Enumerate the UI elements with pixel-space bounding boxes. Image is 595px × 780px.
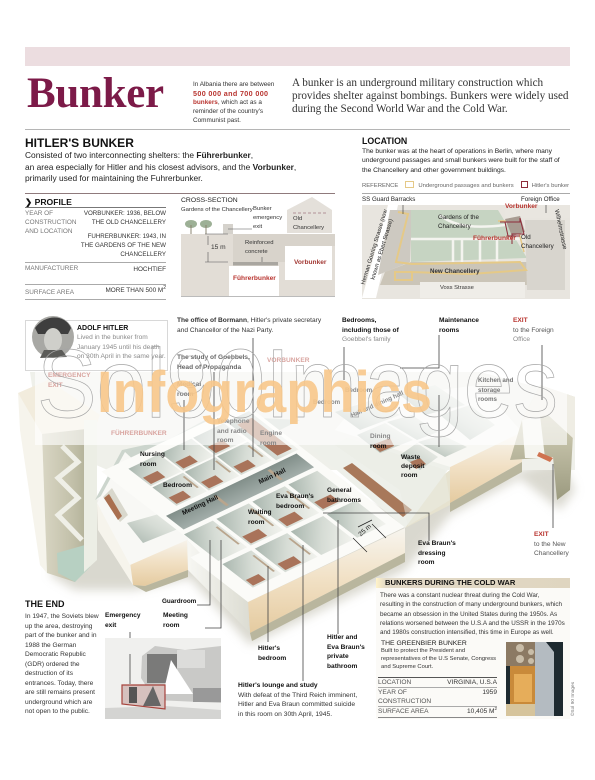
label: Hitler and Eva Braun's bathroom: Hitler and xyxy=(327,634,357,641)
label: vorbunker: VORBUNKER xyxy=(267,357,310,364)
label: nursing xyxy=(140,451,165,468)
cross-section title: CROSS-SECTION xyxy=(181,197,238,204)
callout: Albania: Communist past. xyxy=(193,117,241,124)
label: Hitler's bedroom xyxy=(258,644,286,663)
map: SS barracks: SS Guard Barracks xyxy=(362,196,415,203)
label: maintenance xyxy=(439,317,479,334)
label: Hitler's bedroom: Hitler's xyxy=(258,645,280,652)
shadow under building xyxy=(50,460,575,645)
heading: profile: ❯ PROFILE xyxy=(25,197,72,207)
fade strip over top of illustration xyxy=(35,345,567,445)
profile labels: AND LOCATION xyxy=(25,228,72,235)
row values: 10,405 M2 xyxy=(467,706,497,715)
heading: Hitler's bunker: HITLER'S BUNKER xyxy=(25,136,134,150)
label: medical room: Medical xyxy=(177,381,201,388)
concrete label: Reinforced xyxy=(245,240,274,246)
label: emergency exit top: EXIT xyxy=(48,382,63,388)
map legend: REFERENCE Underground passages and bunkers Hitler's bunker xyxy=(362,183,569,189)
row values: 1959 xyxy=(482,689,497,696)
map: new chancellery: New Chancellery xyxy=(430,268,480,275)
heading: location: LOCATION xyxy=(362,136,407,146)
right wing faces xyxy=(405,470,450,528)
fuhrerbunker label: Führerbunker xyxy=(233,275,276,282)
label: maintenance: Maintenance xyxy=(439,317,479,324)
profile values: Fuhrerbunker: FUHRERBUNKER: 1943, IN xyxy=(88,233,166,240)
label: exit new chancellery: to the New xyxy=(534,540,566,548)
panel text: resulting in the construction of many underground bunkers, which xyxy=(380,601,562,608)
photo: Greenbrier bunker door xyxy=(506,642,563,716)
label: 25 m: 25 m xyxy=(357,523,373,538)
main block plan with rooms xyxy=(88,403,405,602)
label: bedrooms: Bedrooms, xyxy=(342,317,376,324)
label: emergency exit top: EMERGENCY xyxy=(48,372,90,379)
bio: Lived in the bunker from xyxy=(77,334,148,341)
callout: Albania: 500 000 and 700 000 xyxy=(193,89,268,98)
label: fuhrerbunker: FÜHRERBUNKER xyxy=(111,430,167,437)
label: waiting: room xyxy=(248,518,264,526)
label: general bathrooms: bathrooms xyxy=(327,496,361,504)
panel text: relations worsened between the U.S.A and the USSR in the 1970s xyxy=(380,620,565,627)
profile labels: YEAR OF xyxy=(25,210,53,217)
text block: Hitler's bunker description xyxy=(25,150,296,183)
text block: the end: up the area, destroying xyxy=(25,622,92,630)
text block: the end: Democratic Republic xyxy=(25,651,86,658)
row labels: LOCATION xyxy=(378,679,411,686)
panel: profile xyxy=(25,197,166,300)
profile values: THE OLD CHANCELLERY xyxy=(92,219,166,226)
label: meeting hall: Meeting Hall xyxy=(181,494,219,517)
label: medical room: room xyxy=(177,390,193,398)
map: old chancellery: Old xyxy=(521,234,531,241)
sub text xyxy=(381,647,496,671)
label: exit new chancellery: Chancellery xyxy=(534,550,569,557)
stair tower xyxy=(18,380,100,582)
label: maintenance: rooms xyxy=(439,326,459,334)
concrete label xyxy=(245,240,274,254)
label: exit foreign office: EXIT xyxy=(513,317,528,324)
label: kitchen: rooms xyxy=(478,396,497,403)
map: hermann goering strasse: Herman Goering Strasse (now xyxy=(361,209,389,285)
surface value: MORE THAN 500 M2 xyxy=(105,285,166,294)
profile labels xyxy=(25,210,76,235)
label: upper bedroom: Bedroom xyxy=(345,387,372,394)
watermark: Infographics xyxy=(97,360,432,425)
label: emergency exit: Emergency xyxy=(105,612,141,619)
map: fuhrerbunker: Führerbunker xyxy=(473,235,516,242)
map labels xyxy=(360,196,567,291)
credit: ©Sol 90 Images xyxy=(571,682,576,716)
label: dining xyxy=(370,433,391,450)
label: Goebbels study: The study of Goebbels, xyxy=(177,354,250,361)
label: Eva Braun's dressing room: Eva Braun's xyxy=(418,540,456,547)
label: Eva Braun's bedroom: bedroom xyxy=(276,502,304,510)
panel header xyxy=(376,578,570,588)
label: meeting room: Meeting xyxy=(163,612,188,619)
label: Eva Braun's dressing room: room xyxy=(418,559,434,566)
panel: Adolf Hitler portrait card xyxy=(25,320,168,371)
label: hall: Hall and dining hall xyxy=(350,390,405,419)
panel text xyxy=(380,591,565,638)
name: ADOLF HITLER xyxy=(77,325,128,332)
exit label xyxy=(253,206,282,230)
map: gardens xyxy=(438,214,479,230)
label: engine: Engine xyxy=(260,430,282,437)
text block: Hitler's lounge: Hitler's lounge and study xyxy=(238,682,318,689)
left wing xyxy=(97,452,200,592)
label: Eva Braun's dressing room xyxy=(418,540,456,566)
label: Hitler and Eva Braun's bathroom: Eva Braun's xyxy=(327,644,365,650)
label: exit foreign office xyxy=(513,317,554,343)
label: main hall: Main Hall xyxy=(258,467,287,486)
map: hermann goering strasse: known as Ebert Strasse) xyxy=(370,218,394,280)
right wing rooms xyxy=(335,385,495,470)
label: waste: Waste xyxy=(401,454,420,461)
exit label: Bunker xyxy=(253,206,272,212)
row values xyxy=(447,678,497,716)
watermark: Sol90Images xyxy=(37,329,558,438)
callout: Albania: In Albania there are between xyxy=(193,81,274,88)
main block white corner xyxy=(187,515,270,602)
exit label: exit xyxy=(253,224,262,230)
profile values: Fuhrerbunker: THE GARDENS OF THE NEW xyxy=(81,242,166,249)
subheading: THE GREENBIER BUNKER xyxy=(381,640,467,647)
label: guardroom: Guardroom xyxy=(162,598,196,605)
label: bedrooms: including those of xyxy=(342,326,399,334)
label: kitchen xyxy=(478,377,513,403)
text block: location xyxy=(362,148,560,174)
profile values: Fuhrerbunker: CHANCELLERY xyxy=(120,251,166,258)
label: exit foreign office: to the Foreign xyxy=(513,326,554,334)
profile values: VORBUNKER: 1936, BELOW xyxy=(84,210,166,217)
label: Goebbels study xyxy=(177,354,250,370)
sub text: Built to protect the President and xyxy=(381,648,465,654)
text block: Hitler's lounge xyxy=(238,681,357,719)
text block: location: the Chancellery and other government buildings. xyxy=(362,167,506,174)
sub text: representatives of the U.S Senate, Congress xyxy=(381,656,496,662)
label: dining: room xyxy=(370,442,386,450)
label: Hitler and Eva Braun's bathroom: bathroom xyxy=(327,662,357,670)
upper roof area xyxy=(30,372,575,480)
sub text: and Supreme Court. xyxy=(381,664,433,670)
label: emergency exit top xyxy=(48,372,90,388)
exit label: emergency xyxy=(253,215,282,221)
text block: the end: are still remains present xyxy=(25,689,95,696)
row values: VIRGINIA, U.S.A xyxy=(447,679,497,686)
old chancellery label xyxy=(293,216,324,231)
manufacturer: MANUFACTURER xyxy=(25,265,78,272)
corridor between blocks xyxy=(313,435,450,528)
label: telephone: room xyxy=(217,437,233,444)
map: old chancellery: Chancellery xyxy=(521,243,554,250)
intro text xyxy=(292,77,569,115)
text block: the end: not open to the public. xyxy=(25,708,90,715)
gardens label: Gardens of the Chancellery xyxy=(181,207,253,213)
text block: the end: destruction of its xyxy=(25,670,73,677)
label: bedroom: Bedroom xyxy=(163,482,192,489)
exit block xyxy=(510,385,575,500)
text block: the end: In 1947, the Soviets blew xyxy=(25,613,99,620)
old chancellery label: Chancellery xyxy=(293,225,324,231)
cross-section labels xyxy=(181,197,326,282)
row labels: SURFACE AREA xyxy=(378,708,429,715)
map: foreign office: Foreign Office xyxy=(521,196,560,203)
text block: the end: entrances. Today, there xyxy=(25,680,93,686)
label: Hitler and Eva Braun's bathroom xyxy=(327,633,365,671)
concrete label: concrete xyxy=(245,248,268,254)
label: exit foreign office: Office xyxy=(513,336,530,343)
surface area: SURFACE AREA xyxy=(25,289,74,296)
profile values xyxy=(84,210,166,226)
bio: on 30th April in the same year. xyxy=(77,353,166,360)
vorbunker label: Vorbunker xyxy=(294,259,326,266)
panel header: BUNKERS DURING THE COLD WAR xyxy=(385,578,515,587)
label: exit new chancellery xyxy=(534,531,569,557)
label: Bormann office: and Chancellor of the Nazi Party. xyxy=(177,326,273,334)
callout: Albania: bunkers, which act as a xyxy=(193,99,262,106)
label: nursing: room xyxy=(140,460,156,468)
label: general bathrooms xyxy=(327,487,361,504)
text block: Hitler's lounge: With defeat of the Third Reich imminent, xyxy=(238,692,357,698)
map: gardens: Chancellery xyxy=(438,223,471,230)
label: telephone: and radio xyxy=(217,428,247,434)
map: voss strasse: Voss Strasse xyxy=(440,285,474,291)
map: wilhelmstrasse: Wilhelmstrasse xyxy=(553,209,567,250)
text block: the end xyxy=(25,613,99,715)
text block: the end: underground which are xyxy=(25,698,92,706)
front faces of main block xyxy=(248,528,405,633)
intro text: provides shelter against bombings. Bunkers were widely used xyxy=(292,90,569,102)
row labels: YEAR OF xyxy=(378,689,407,696)
text block: Hitler's bunker description: Consisted of two interconnecting shelters: the Führerbunker, xyxy=(25,150,253,160)
label: Hitler's bedroom: bedroom xyxy=(258,654,286,662)
label: general bathrooms: General xyxy=(327,487,352,494)
label: engine xyxy=(260,430,282,446)
callout: Albania xyxy=(193,81,274,124)
title: Bunker xyxy=(27,70,164,117)
dimension marks xyxy=(353,520,386,552)
label: bedrooms: Goebbel's family xyxy=(342,336,391,343)
label: waste xyxy=(401,454,424,479)
manufacturer value: HOCHTIEF xyxy=(133,266,166,273)
label: Hitler and Eva Braun's bathroom: private xyxy=(327,653,349,660)
label: Bormann office xyxy=(177,317,322,334)
map: vorbunker: Vorbunker xyxy=(505,203,538,210)
text block: Hitler's lounge: in this room on 30th April, 1945. xyxy=(238,710,332,718)
label: nursing: Nursing xyxy=(140,451,165,458)
label: emergency exit: exit xyxy=(105,622,116,628)
header band xyxy=(25,47,570,66)
depth label: 15 m xyxy=(211,244,226,251)
intro text: A bunker is an underground military construction which xyxy=(292,77,543,89)
row labels xyxy=(378,678,431,716)
text block: location: The bunker was at the heart of operations in Berlin, where many xyxy=(362,148,552,155)
panel text: and 1980s construction intensified, this time in Europe as well. xyxy=(380,629,554,636)
label: kitchen: Kitchen and xyxy=(478,377,513,384)
label: telephone: Telephone xyxy=(217,418,249,425)
text block: Hitler's bunker description: an area especially for Hitler and his closest advisors, and the Vorbunker, xyxy=(25,162,296,172)
text block: location: underground passages and small bunkers were built for the staff of xyxy=(362,157,560,164)
label: dining: Dining xyxy=(370,433,391,440)
map: gardens: Gardens of the xyxy=(438,214,479,221)
text block: Hitler's bunker description: primarily used for maintaining the Fuhrerbunker. xyxy=(25,173,203,183)
label: bedrooms xyxy=(342,317,399,343)
photo: ruined bunker entrance xyxy=(105,638,221,719)
label: waste: room xyxy=(401,472,417,479)
callout: Albania: reminder of the country's xyxy=(193,108,263,115)
label: telephone xyxy=(217,418,250,444)
bio: January 1945 until his death xyxy=(77,344,159,350)
panel text: became an obsession in the United States during the 1950s. As xyxy=(380,611,557,618)
bio xyxy=(77,334,166,360)
right wing roof xyxy=(335,385,522,467)
label: Eva Braun's bedroom: Eva Braun's xyxy=(276,493,314,500)
text block: the end: 1988 the German xyxy=(25,642,76,648)
label: Bormann office: The office of Bormann, Hitler's private secretary xyxy=(177,317,321,324)
portrait xyxy=(32,316,74,358)
text block: the end: part of the bunker and in xyxy=(25,632,96,639)
label: lower bedroom: Bedroom xyxy=(313,399,340,406)
panel text: There was a constant nuclear threat during the Cold War, xyxy=(380,592,539,599)
label: meeting room: room xyxy=(163,622,179,628)
label: emergency exit xyxy=(105,612,141,628)
profile values: Fuhrerbunker xyxy=(81,233,166,258)
label: medical room xyxy=(177,381,201,398)
label: waste: deposit xyxy=(401,463,424,470)
label: engine: room xyxy=(260,440,276,446)
data table xyxy=(378,677,497,718)
map: old chancellery xyxy=(521,234,554,250)
ramp xyxy=(95,417,300,500)
label: waiting xyxy=(248,509,272,526)
row labels: CONSTRUCTION xyxy=(378,698,431,705)
label: Eva Braun's bedroom xyxy=(276,493,314,510)
heading: the end: THE END xyxy=(25,599,65,609)
leader lines xyxy=(130,335,553,681)
panel: bunkers during the cold war xyxy=(376,578,570,719)
label: kitchen: storage xyxy=(478,386,500,394)
label: Eva Braun's dressing room: dressing xyxy=(418,550,445,557)
old chancellery label: Old xyxy=(293,216,302,222)
label: exit new chancellery: EXIT xyxy=(534,531,549,538)
label: waiting: Waiting xyxy=(248,509,272,516)
profile labels: CONSTRUCTION xyxy=(25,219,76,226)
intro text: during the Second World War and the Cold War. xyxy=(292,103,508,115)
text block: the end: (GDR) ordered the xyxy=(25,660,80,668)
text block: Hitler's lounge: Hitler and Eva Braun committed suicide xyxy=(238,701,355,708)
label: Goebbels study: Head of Propaganda xyxy=(177,364,241,370)
label: meeting room xyxy=(163,611,188,630)
